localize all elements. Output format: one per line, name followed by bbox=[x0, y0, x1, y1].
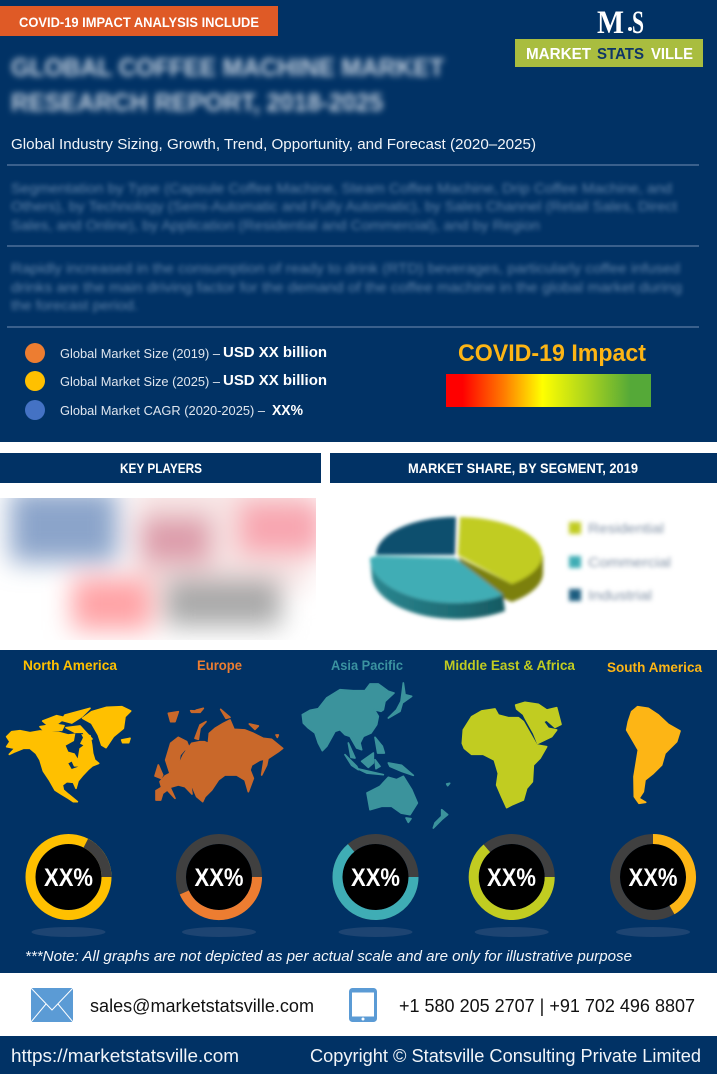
stat: market size 2019: USD XX billion bbox=[223, 345, 327, 361]
key players logos (blurred) bbox=[10, 480, 323, 630]
pie slice: residential side bbox=[458, 555, 543, 602]
divider lines bbox=[7, 165, 699, 327]
stat: market size 2025: USD XX billion bbox=[223, 373, 327, 389]
region heading: north america: North America bbox=[23, 657, 117, 673]
map: middle east and africa bbox=[462, 702, 561, 808]
donut: asia pacific bbox=[338, 839, 414, 937]
donut: europe: XX% bbox=[194, 864, 244, 892]
panel: footer: Copyright © Statsville Consulting Private Limited bbox=[310, 1046, 701, 1066]
icon: email envelope bbox=[31, 988, 73, 1022]
title (blurred) bbox=[11, 54, 444, 117]
pie slice: commercial bbox=[370, 556, 503, 603]
logo: market stats ville: MARKET bbox=[526, 46, 591, 63]
banner: covid-19 impact analysis bbox=[0, 6, 278, 36]
pie slice: commercial side bbox=[370, 558, 505, 619]
donut: middle east and africa bbox=[474, 839, 550, 937]
segmentation text (blurred): Sales, and Online), by Application (Residential and Commercial), and by Region bbox=[11, 217, 540, 233]
stat: market cagr: XX% bbox=[272, 403, 303, 419]
segmentation text (blurred) bbox=[11, 180, 677, 233]
stat: market cagr bbox=[25, 400, 303, 420]
market driver text (blurred): the forecast period. bbox=[11, 297, 138, 313]
donut: asia pacific: XX% bbox=[351, 864, 400, 892]
donut: europe bbox=[181, 839, 257, 937]
pie legend (blurred) bbox=[569, 520, 671, 603]
pie legend (blurred): Commercial bbox=[588, 554, 671, 570]
segmentation text (blurred): Others), by Technology (Semi-Automatic and Fully Automatic), by Sales Channel (Retail Sales, Direct bbox=[11, 198, 677, 214]
subtitle: Global Industry Sizing, Growth, Trend, Opportunity, and Forecast (2020–2025) bbox=[11, 136, 536, 153]
pie chart: market share by segment bbox=[370, 517, 543, 619]
region heading: asia pacific: Asia Pacific bbox=[331, 657, 403, 673]
title (blurred): RESEARCH REPORT, 2018-2025 bbox=[11, 89, 383, 117]
panel: footer: https://marketstatsville.com bbox=[11, 1046, 239, 1066]
pie slice: residential bbox=[458, 517, 542, 584]
region heading: south america: South America bbox=[607, 659, 702, 675]
pie slice: industrial bbox=[376, 517, 456, 555]
panel: market share heading bbox=[330, 453, 717, 483]
region heading: europe: Europe bbox=[197, 657, 242, 673]
logo: market stats ville: S bbox=[632, 5, 644, 41]
panel: footer bbox=[0, 1036, 717, 1074]
logo: market stats ville: VILLE bbox=[651, 46, 693, 63]
logo: market stats ville: M bbox=[597, 5, 624, 41]
panel: key players heading bbox=[0, 453, 321, 483]
banner: covid-19 impact analysis: COVID-19 IMPACT ANALYSIS INCLUDE bbox=[19, 14, 259, 30]
contact phone numbers: +1 580 205 2707 | +91 702 496 8807 bbox=[399, 996, 695, 1016]
covid-19 impact scale: COVID-19 Impact bbox=[458, 340, 646, 367]
panel: regional background bbox=[0, 650, 717, 973]
key statistics list bbox=[25, 343, 327, 420]
map: south america bbox=[627, 707, 680, 803]
pie legend (blurred): Industrial bbox=[588, 587, 652, 603]
stat: market size 2019: Global Market Size (2019) – bbox=[60, 346, 221, 361]
stat: market size 2019 bbox=[25, 343, 327, 363]
panel: key players heading: KEY PLAYERS bbox=[120, 460, 202, 476]
stat: market size 2025 bbox=[25, 371, 327, 391]
stat: market size 2025: Global Market Size (2025) – bbox=[60, 374, 221, 389]
covid-19 impact scale bbox=[446, 340, 651, 407]
panel: market share heading: MARKET SHARE, BY SEGMENT, 2019 bbox=[408, 460, 638, 476]
segmentation text (blurred): Segmentation by Type (Capsule Coffee Machine, Steam Coffee Machine, Drip Coffee Machine, and bbox=[11, 180, 672, 196]
logo: market stats ville: STATS bbox=[597, 46, 644, 63]
region heading: middle east and africa: Middle East & Africa bbox=[444, 657, 575, 673]
stat: market cagr: Global Market CAGR (2020-2025) – bbox=[60, 403, 266, 418]
map: asia pacific bbox=[302, 683, 450, 828]
market driver text (blurred): drinks are the main driving factor for the demand of the coffee machine in the global market during bbox=[11, 279, 682, 295]
donut: north america bbox=[30, 839, 106, 937]
pie legend (blurred): Residential bbox=[588, 520, 664, 536]
donut: middle east and africa: XX% bbox=[487, 864, 536, 892]
donut: south america bbox=[615, 839, 691, 937]
title (blurred): GLOBAL COFFEE MACHINE MARKET bbox=[11, 54, 444, 82]
market driver text (blurred): Rapidly increased in the consumption of ready to drink (RTD) beverages, particularly coffee infused bbox=[11, 260, 680, 276]
donut: south america: XX% bbox=[628, 864, 678, 892]
panel: top header background bbox=[0, 0, 717, 442]
market driver text (blurred) bbox=[11, 260, 682, 313]
donut: north america: XX% bbox=[44, 864, 93, 892]
icon: phone bbox=[349, 988, 377, 1022]
map: europe and russia bbox=[155, 708, 283, 802]
contact email: sales@marketstatsville.com bbox=[90, 996, 314, 1016]
logo: market stats ville bbox=[515, 5, 703, 67]
map: north america bbox=[7, 707, 131, 802]
note: ***Note: All graphs are not depicted as per actual scale and are only for illustrative purpose bbox=[25, 948, 632, 965]
